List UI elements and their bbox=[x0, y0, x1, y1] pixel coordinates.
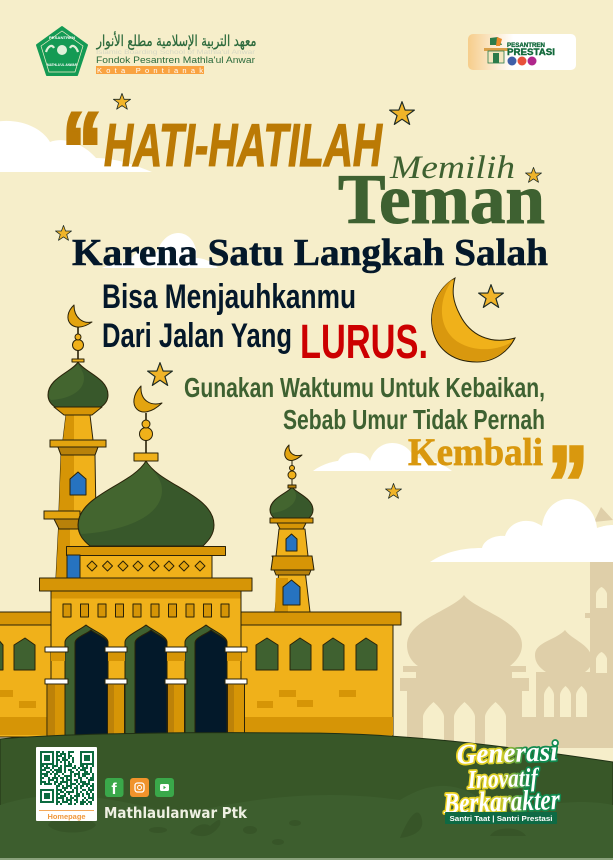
arches bbox=[65, 625, 227, 737]
right tower bbox=[270, 445, 314, 612]
text: kembali: Kembali bbox=[408, 431, 543, 474]
icon: facebook bbox=[105, 778, 124, 798]
text: karena satu langkah salah: Karena Satu Langkah Salah bbox=[72, 232, 548, 274]
text: dari jalan yang: Dari Jalan Yang bbox=[102, 317, 292, 355]
social handle: Mathlaulanwar Ptk bbox=[104, 804, 248, 822]
badge: pesantren prestasi: PRESTASI bbox=[507, 47, 555, 58]
heading: hati-hatilah: HATI-HATILAH bbox=[104, 112, 383, 179]
header text: institution name bbox=[96, 31, 256, 75]
large crescent moon bbox=[432, 278, 515, 362]
pillars bbox=[45, 647, 247, 737]
header logo: pesantren emblem: PESANTREN bbox=[49, 36, 76, 40]
central building bbox=[40, 578, 252, 737]
header logo: pesantren emblem bbox=[37, 27, 87, 75]
icon: youtube bbox=[155, 778, 174, 797]
side wings bbox=[0, 612, 401, 737]
slogan logo: generasi inovatif berkarakter: Inovatif bbox=[466, 763, 540, 794]
closing quote mark: ” bbox=[548, 426, 588, 542]
badge: pesantren prestasi: PESANTREN bbox=[507, 43, 545, 49]
clouds bbox=[0, 121, 613, 562]
slogan logo: generasi inovatif berkarakter: Santri Taat | Santri Prestasi bbox=[450, 814, 552, 823]
header text: institution name: Islamic Boarding School of Mathla'ul Anwar bbox=[96, 49, 256, 56]
heading: memilih: Memilih bbox=[389, 150, 515, 186]
stars bbox=[55, 93, 542, 498]
icon: facebook: f bbox=[111, 781, 117, 798]
slogan logo: generasi inovatif berkarakter bbox=[442, 736, 561, 824]
header text: institution name: معهد التربية الإسلامية مطلع الأنوار bbox=[96, 31, 256, 50]
header text: institution name: Fondok Pesantren Mathla'ul Anwar bbox=[96, 55, 255, 65]
text: bisa menjauhkanmu: Bisa Menjauhkanmu bbox=[102, 278, 356, 316]
heading: teman: Teman bbox=[338, 161, 545, 239]
text: lurus: LURUS. bbox=[300, 316, 428, 369]
slogan logo: generasi inovatif berkarakter: Berkarakter bbox=[442, 784, 561, 820]
slogan logo: generasi inovatif berkarakter: Generasi bbox=[456, 736, 558, 771]
ground bbox=[0, 733, 613, 860]
qr code card bbox=[36, 747, 97, 821]
badge: pesantren prestasi bbox=[468, 34, 576, 70]
left tower bbox=[44, 305, 108, 578]
header logo: pesantren emblem: MATHLA'UL ANWAR bbox=[47, 63, 77, 67]
qr code card: Homepage bbox=[48, 814, 86, 821]
background mosque silhouette bbox=[400, 507, 613, 748]
icon: instagram bbox=[130, 778, 149, 797]
opening quote mark: “ bbox=[62, 92, 102, 208]
header text: institution name: Kota Pontianak bbox=[97, 66, 203, 75]
mosque illustration bbox=[0, 305, 401, 737]
main dome bbox=[66, 386, 226, 578]
